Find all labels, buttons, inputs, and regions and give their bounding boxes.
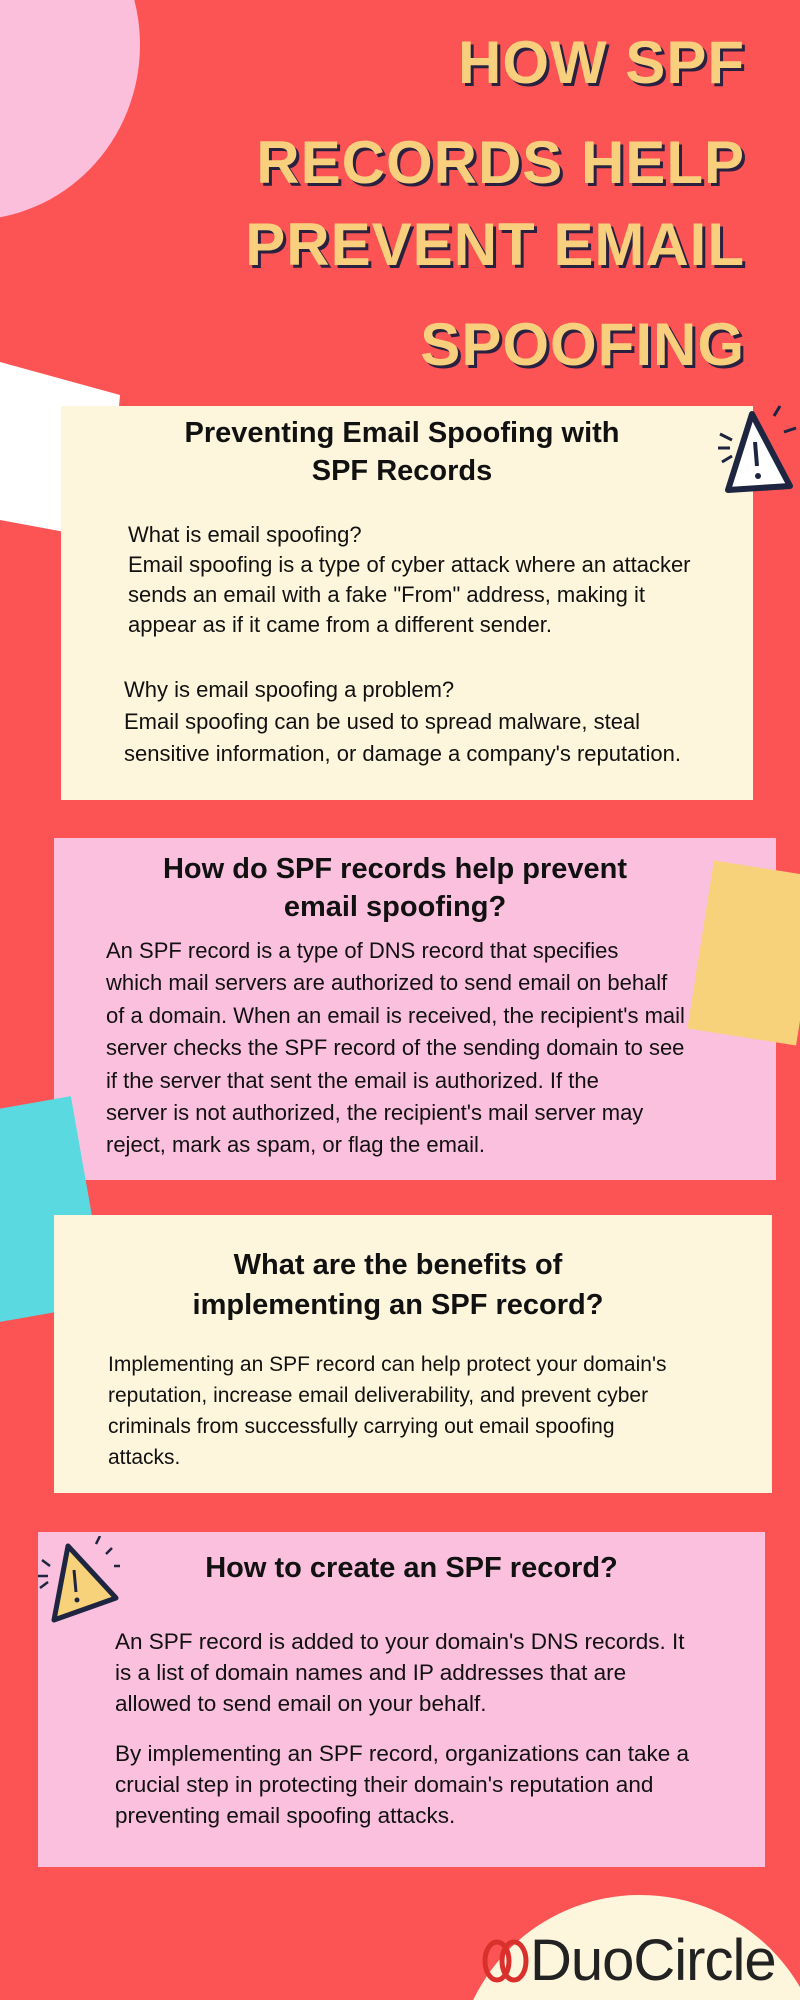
- body text: Implementing an SPF record can help protect your domain's: [108, 1353, 666, 1376]
- body text: [115, 1629, 685, 1716]
- body text: An SPF record is added to your domain's DNS records. It: [115, 1629, 685, 1654]
- heading: Preventing Email Spoofing with: [184, 417, 620, 449]
- body text: allowed to send email on your behalf.: [115, 1691, 486, 1716]
- heading: [163, 853, 627, 923]
- heading: [193, 1249, 603, 1321]
- text: why a problem: Why is email spoofing a problem?: [124, 677, 454, 702]
- body text: if the server that sent the email is authorized. If the: [106, 1068, 599, 1093]
- text: what is spoofing: [128, 522, 691, 637]
- icon: warning triangle bottom: [38, 1536, 120, 1622]
- decorative cream circle: [473, 1895, 800, 2000]
- decorative pink circle: [0, 0, 140, 220]
- panel: what is email spoofing: [61, 406, 753, 800]
- heading: How to create an SPF record?: [205, 1552, 618, 1584]
- body text: reputation, increase email deliverability, and prevent cyber: [108, 1384, 648, 1407]
- text: what is spoofing: Email spoofing is a type of cyber attack where an attacker: [128, 552, 691, 577]
- logo: DuoCircle: DuoCircle: [530, 1928, 776, 1993]
- body text: server is not authorized, the recipient's mail server may: [106, 1100, 643, 1125]
- heading: What are the benefits of: [234, 1249, 562, 1281]
- text: what is spoofing: appear as if it came from a different sender.: [128, 612, 552, 637]
- title: PREVENT EMAIL: [245, 211, 745, 278]
- heading: email spoofing?: [284, 891, 506, 923]
- body text: [106, 938, 685, 1157]
- heading: [184, 417, 620, 487]
- decorative white shape: [0, 362, 120, 532]
- text: why a problem: sensitive information, or damage a company's reputation.: [124, 741, 681, 766]
- body text: criminals from successfully carrying out email spoofing: [108, 1415, 615, 1438]
- decorative yellow sticky: [687, 860, 800, 1046]
- body text: [108, 1353, 666, 1469]
- body text: is a list of domain names and IP addresses that are: [115, 1660, 626, 1685]
- body text: An SPF record is a type of DNS record that specifies: [106, 938, 618, 963]
- panel: benefits: [54, 1215, 772, 1493]
- body text: reject, mark as spam, or flag the email.: [106, 1132, 485, 1157]
- text: why a problem: [124, 677, 681, 766]
- panel: how to create: crucial step in protecting their domain's reputation and: [115, 1772, 653, 1797]
- body text: which mail servers are authorized to send email on behalf: [106, 970, 667, 995]
- panel: how to create: preventing email spoofing attacks.: [115, 1803, 455, 1828]
- title: RECORDS HELP: [256, 129, 745, 196]
- body text: server checks the SPF record of the sending domain to see: [106, 1035, 684, 1060]
- heading: How do SPF records help prevent: [163, 853, 627, 885]
- icon: warning triangle top: [718, 405, 796, 493]
- heading: SPF Records: [312, 455, 492, 487]
- panel: how to create: By implementing an SPF record, organizations can take a: [115, 1741, 689, 1766]
- title: SPOOFING: [420, 311, 745, 378]
- heading: implementing an SPF record?: [193, 1289, 603, 1321]
- body text: of a domain. When an email is received, the recipient's mail: [106, 1003, 685, 1028]
- title: [245, 29, 746, 378]
- panel: how to create: [38, 1532, 765, 1867]
- decorative cyan sticky: [0, 1096, 107, 1324]
- text: what is spoofing: What is email spoofing?: [128, 522, 362, 547]
- body text: attacks.: [108, 1446, 180, 1469]
- panel: how SPF helps: [54, 838, 776, 1180]
- text: what is spoofing: sends an email with a fake "From" address, making it: [128, 582, 645, 607]
- text: why a problem: Email spoofing can be used to spread malware, steal: [124, 709, 640, 734]
- title: HOW SPF: [458, 29, 745, 96]
